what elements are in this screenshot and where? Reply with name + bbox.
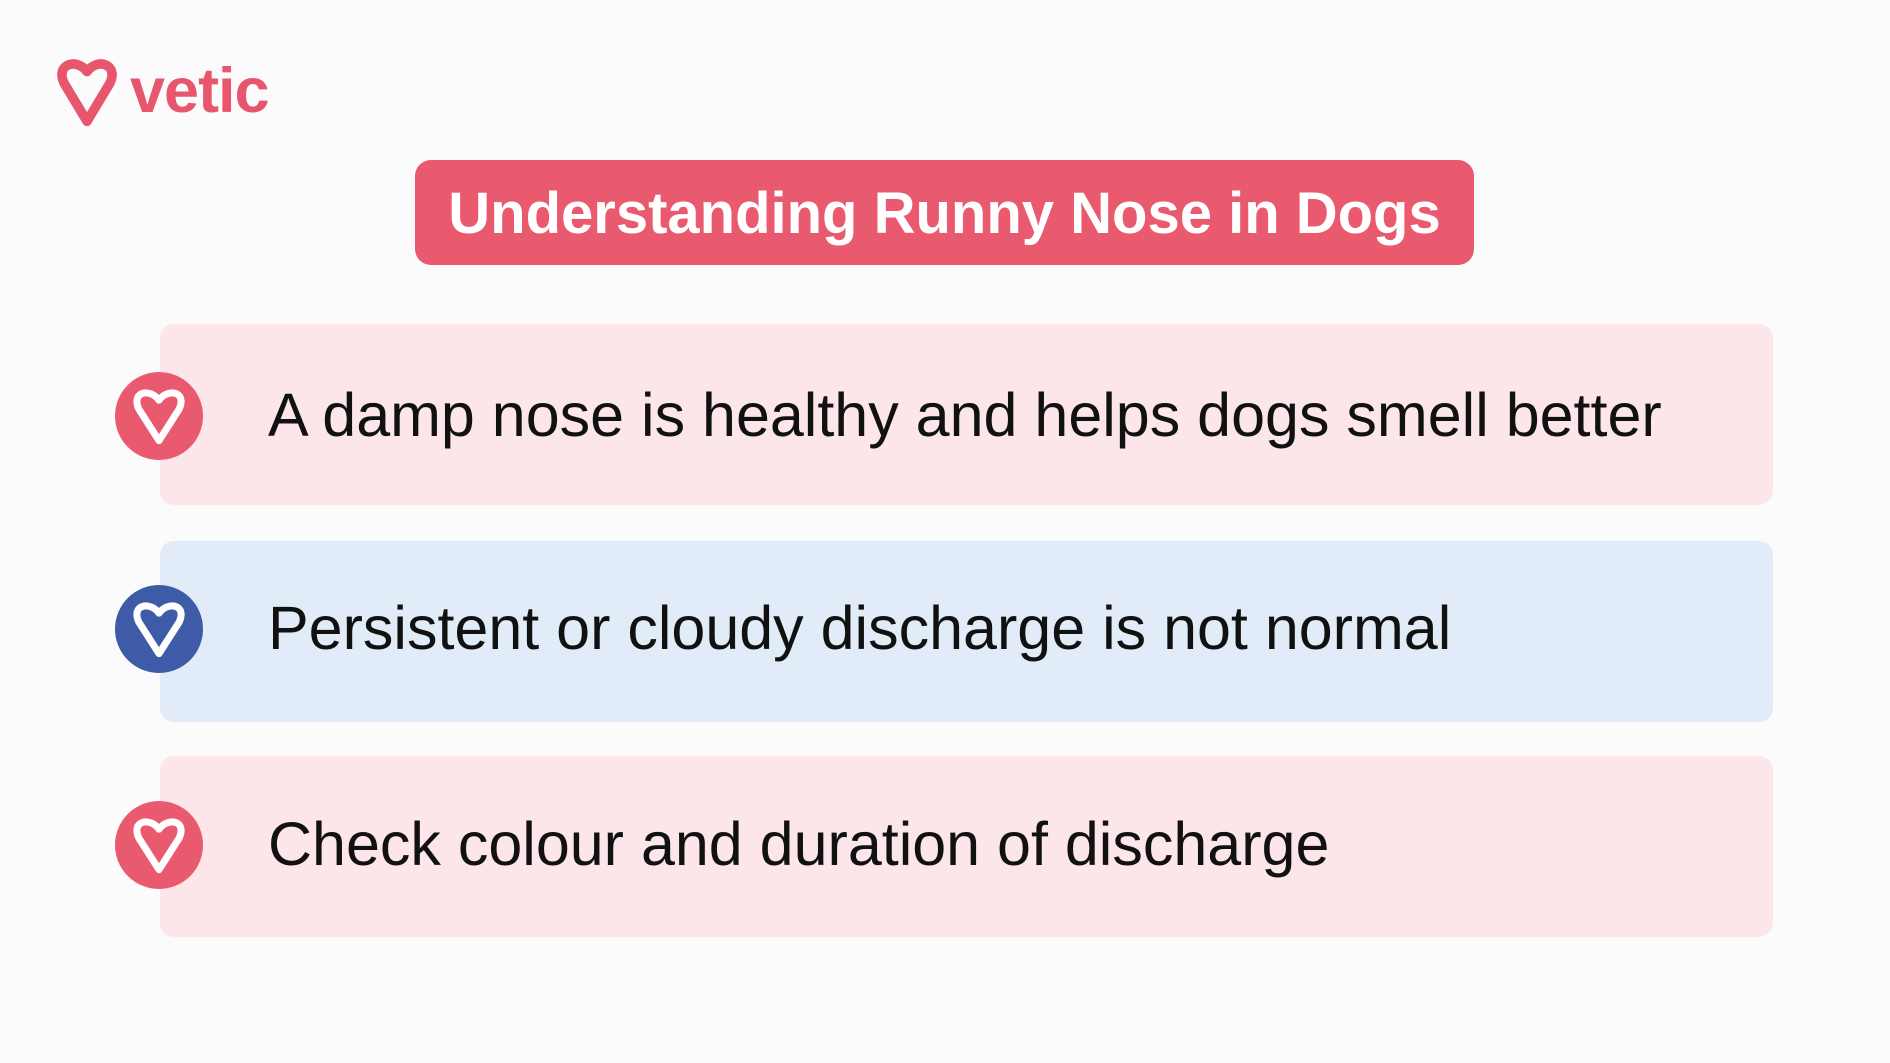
- title: Understanding Runny Nose in Dogs: [448, 181, 1441, 246]
- panel: point 2: [160, 541, 1773, 722]
- logo: vetic: [130, 56, 269, 126]
- panel: point 1: [160, 324, 1773, 505]
- panel: point 3: [160, 756, 1773, 937]
- title: [415, 160, 1474, 265]
- icon: heart 2: [115, 585, 203, 673]
- logo: [57, 56, 269, 126]
- icon: heart 1: [115, 372, 203, 460]
- text 2: Persistent or cloudy discharge is not normal: [268, 594, 1451, 662]
- icon: heart 3: [115, 801, 203, 889]
- text 3: Check colour and duration of discharge: [268, 810, 1329, 878]
- text 1: A damp nose is healthy and helps dogs smell better: [268, 381, 1662, 449]
